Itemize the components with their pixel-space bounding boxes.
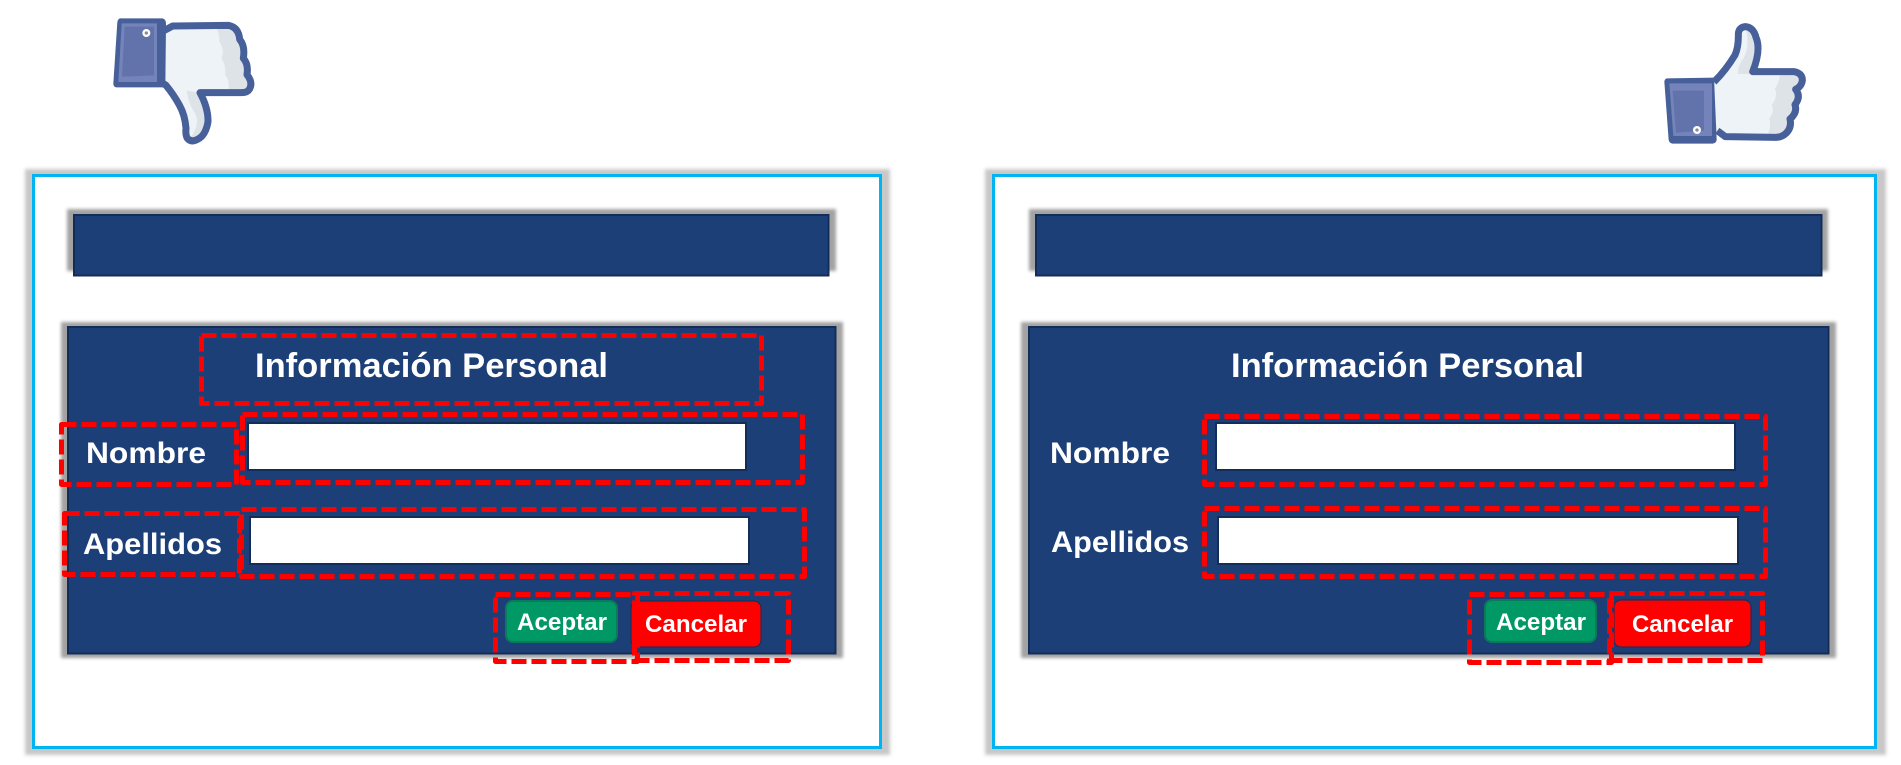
button: Aceptar <box>1485 600 1596 642</box>
form panel: right <box>1021 322 1836 658</box>
button: Cancelar <box>1614 600 1751 647</box>
button: Aceptar: Aceptar <box>517 609 607 636</box>
panel: good form example <box>985 169 1886 755</box>
button: Aceptar: Aceptar <box>1496 609 1586 636</box>
label: Nombre: Nombre <box>1050 437 1170 470</box>
button: Cancelar: Cancelar <box>645 611 747 638</box>
panel: bad form example <box>25 169 890 755</box>
header bar: right <box>1029 209 1828 276</box>
label: Apellidos: Apellidos <box>83 528 222 561</box>
label: Apellidos: Apellidos <box>1051 526 1189 559</box>
icon: thumbs down <box>113 18 251 141</box>
input: Apellidos <box>250 517 749 564</box>
highlights: dashed red boxes <box>1204 416 1766 662</box>
frame: right window <box>985 169 1886 755</box>
input: Nombre <box>248 423 746 470</box>
button: Cancelar: Cancelar <box>1632 611 1733 638</box>
button: Cancelar <box>631 601 761 647</box>
label: Nombre: Nombre <box>86 437 206 470</box>
button: Aceptar <box>506 601 617 642</box>
heading: right form title: Información Personal <box>1231 347 1584 385</box>
heading: left form title: Información Personal <box>255 347 608 385</box>
input: Nombre <box>1216 423 1735 470</box>
highlights: dashed red error boxes <box>62 336 804 662</box>
icon: thumbs up <box>1664 27 1802 144</box>
frame: left window <box>25 169 890 755</box>
input: Apellidos <box>1218 517 1738 564</box>
form panel: left <box>61 322 843 658</box>
header bar: left <box>67 209 836 276</box>
